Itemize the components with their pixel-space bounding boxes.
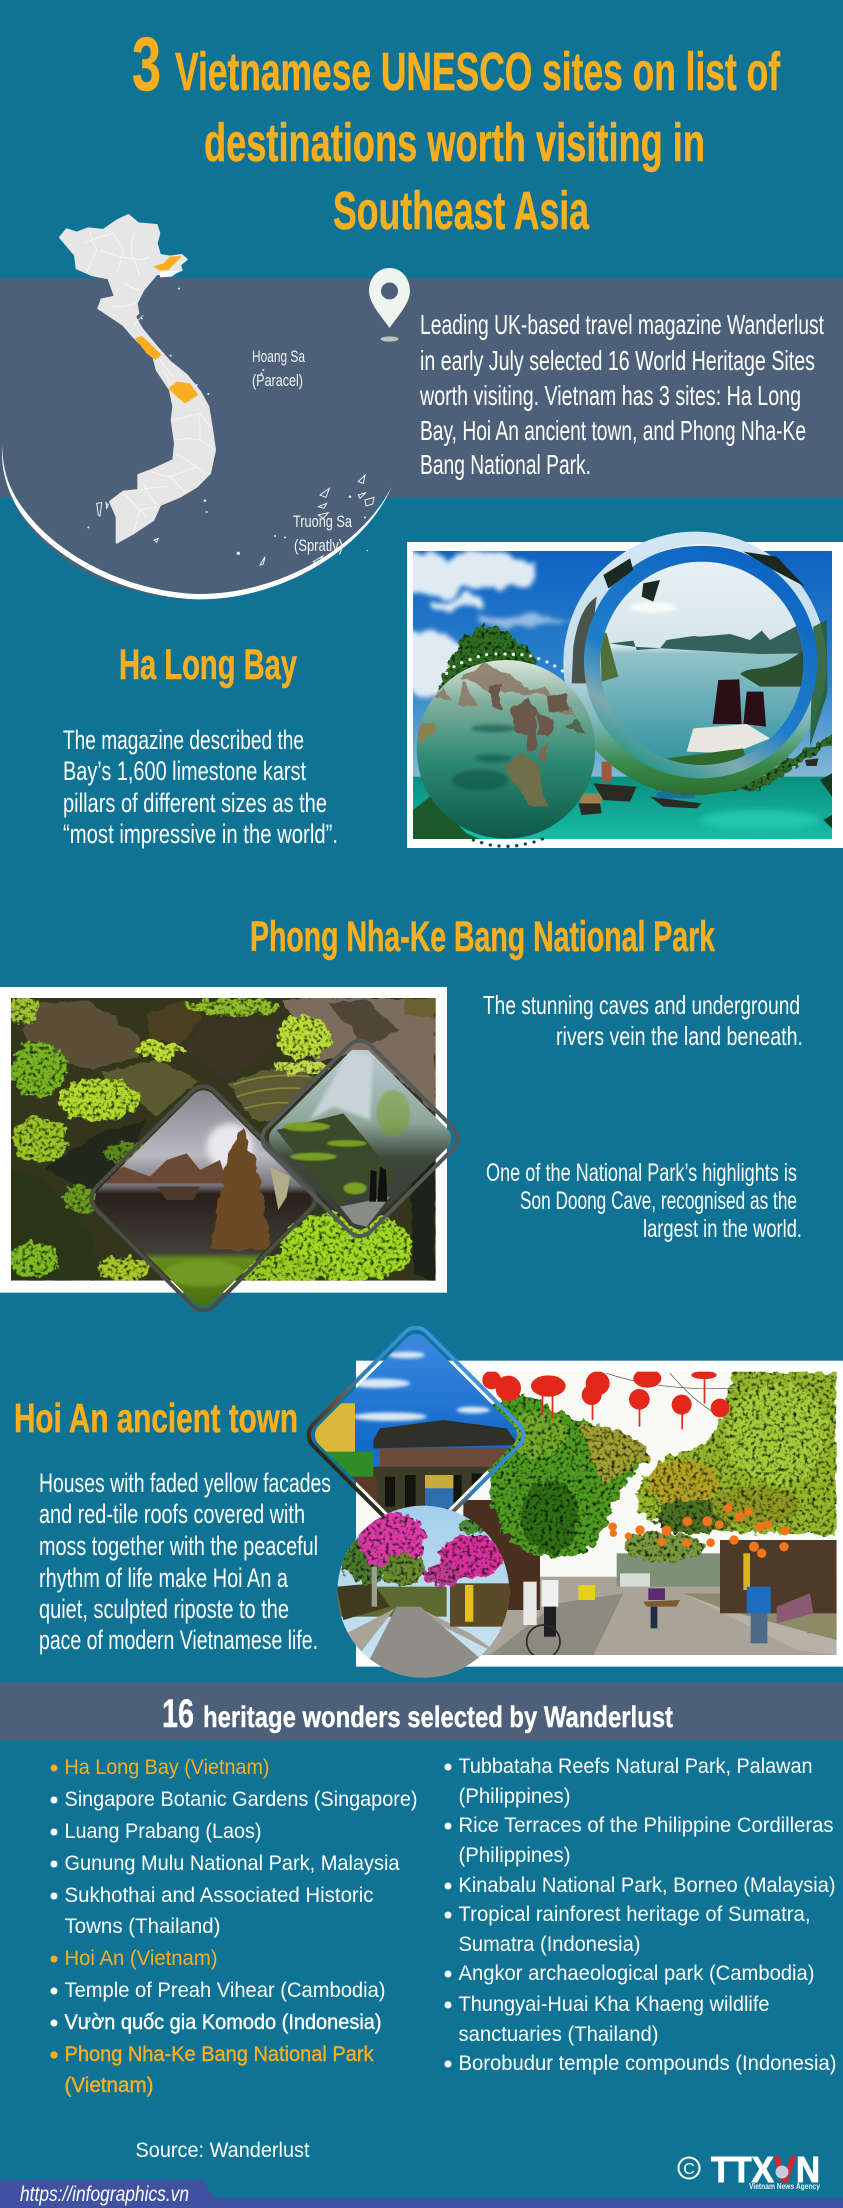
map labels: Truong Sa — [293, 512, 352, 531]
heading band: 16 heritage wonders: heritage wonders selected by Wanderlust — [203, 1701, 673, 1734]
list: left column: Temple of Preah Vihear (Cambodia) — [64, 1979, 386, 2002]
list: left column — [50, 1756, 418, 2097]
text: Hoi An description — [39, 1468, 331, 1655]
outer ring — [563, 532, 827, 795]
list: left column: Ha Long Bay (Vietnam) — [64, 1756, 270, 1779]
highlighted: Hoi An — [168, 382, 198, 403]
Vietnam outline — [60, 215, 215, 543]
list: left column: Gunung Mulu National Park, Malaysia — [64, 1852, 400, 1875]
trees — [477, 1372, 837, 1562]
street — [473, 1577, 837, 1657]
title: 3 — [132, 22, 161, 107]
logo: TTXVN: TTXVN — [711, 2149, 820, 2190]
list: left column: Sukhothai and Associated Historic — [64, 1884, 374, 1907]
map labels — [252, 347, 352, 555]
photo panel: Phong Nha-Ke Bang — [0, 987, 464, 1317]
highlighted: Ha Long Bay — [160, 271, 180, 277]
list: right column: Rice Terraces of the Philippine Cordilleras — [458, 1814, 834, 1837]
list: right column: Borobudur temple compounds (Indonesia) — [458, 2052, 836, 2075]
boats — [578, 758, 818, 815]
people — [523, 1582, 537, 1625]
intro text: Bang National Park. — [420, 449, 591, 480]
list: right column: sanctuaries (Thailand) — [458, 2023, 658, 2046]
diamond B: Son Doong figures — [256, 1035, 464, 1242]
list: right column: Angkor archaeological park (Cambodia) — [458, 1962, 814, 1985]
heading band: 16 heritage wonders: 16 — [162, 1692, 194, 1736]
heading: Ha Long Bay: Ha Long Bay — [119, 641, 297, 689]
circle: bougainvillea street — [337, 1505, 510, 1682]
text: Hoi An description: quiet, sculpted riposte to the — [39, 1594, 289, 1624]
list: right column: Sumatra (Indonesia) — [458, 1933, 640, 1956]
title: Southeast Asia — [333, 181, 590, 241]
list: left column: (Vietnam) — [64, 2074, 154, 2097]
dotted arcs — [445, 652, 564, 675]
orange lanterns — [608, 1504, 790, 1558]
intro text — [419, 309, 824, 480]
list: right column: (Philippines) — [458, 1844, 570, 1867]
map labels: (Spratly) — [294, 536, 343, 555]
aerial karst photo — [417, 660, 595, 840]
logo: TTXVN: C — [683, 2161, 695, 2178]
text: Ha Long Bay description — [63, 725, 338, 849]
footer bar with URL — [0, 2180, 843, 2208]
text: Hoi An description: rhythm of life make Hoi An a — [39, 1563, 289, 1593]
frame strip — [832, 542, 843, 848]
text: Hoi An description: pace of modern Vietnamese life. — [39, 1625, 318, 1655]
list: left column: Towns (Thailand) — [64, 1915, 220, 1938]
red lanterns — [482, 1369, 729, 1429]
intro band — [0, 278, 843, 497]
list: right column: Tropical rainforest heritage of Sumatra, — [458, 1903, 810, 1926]
highlighted: Phong Nha-Ke Bang — [135, 336, 162, 360]
list: right column: Thungyai-Huai Kha Khaeng wildlife — [458, 1993, 770, 2016]
photo panel: Hoi An — [302, 1321, 843, 1682]
diamond: Japanese bridge — [306, 1326, 526, 1517]
list: right column: Tubbataha Reefs Natural Park, Palawan — [458, 1755, 812, 1778]
diamond A: cave lake — [85, 1080, 322, 1317]
heading band: 16 heritage wonders — [0, 1682, 843, 1741]
list: left column: Luang Prabang (Laos) — [64, 1820, 262, 1843]
list: right column — [444, 1755, 836, 2075]
heading: Hoi An ancient town: Hoi An ancient town — [14, 1395, 298, 1441]
text: Ha Long Bay description: pillars of different sizes as the — [63, 788, 327, 818]
text: Ha Long Bay description: Bay’s 1,600 limestone karst — [63, 756, 306, 786]
source: Source: Wanderlust — [136, 2139, 310, 2162]
foliage — [8, 997, 413, 1285]
text: Ha Long Bay description: “most impressive in the world”. — [63, 819, 338, 849]
rocks — [11, 998, 436, 1281]
islands — [97, 475, 374, 565]
footer bar with URL: https://infographics.vn — [20, 2183, 189, 2206]
text: Hoi An description: and red-tile roofs covered with — [39, 1499, 305, 1529]
map panel: Vietnam on rounded backdrop — [0, 215, 393, 599]
text: Phong Nha description 1 — [483, 990, 803, 1051]
icon: location pin — [369, 268, 410, 342]
list: left column: Phong Nha-Ke Bang National Park — [64, 2043, 374, 2066]
list: left column: Hoi An (Vietnam) — [64, 1947, 218, 1970]
photo panel: Ha Long Bay — [380, 532, 843, 848]
map labels: Hoang Sa — [252, 347, 305, 366]
shop fronts — [720, 1540, 837, 1613]
text: Ha Long Bay description: The magazine described the — [63, 725, 304, 755]
logo: TTXVN: Vietnam News Agency — [749, 2182, 820, 2191]
list: right column: Kinabalu National Park, Borneo (Malaysia) — [458, 1874, 836, 1897]
list: left column: Vườn quốc gia Komodo (Indonesia) — [64, 2011, 382, 2034]
map labels: (Paracel) — [252, 371, 303, 390]
title — [132, 22, 781, 241]
lantern strings — [607, 1373, 733, 1420]
inner harbor photo — [600, 562, 803, 765]
green islet — [438, 622, 536, 692]
text: Hoi An description: Houses with faded yellow facades — [39, 1468, 331, 1498]
text: Hoi An description: moss together with the peaceful — [39, 1531, 318, 1561]
list: left column: Singapore Botanic Gardens (Singapore) — [64, 1788, 418, 1811]
white crescent — [2, 445, 392, 599]
text: Phong Nha description 2 — [486, 1159, 802, 1243]
list: right column: (Philippines) — [458, 1785, 570, 1808]
